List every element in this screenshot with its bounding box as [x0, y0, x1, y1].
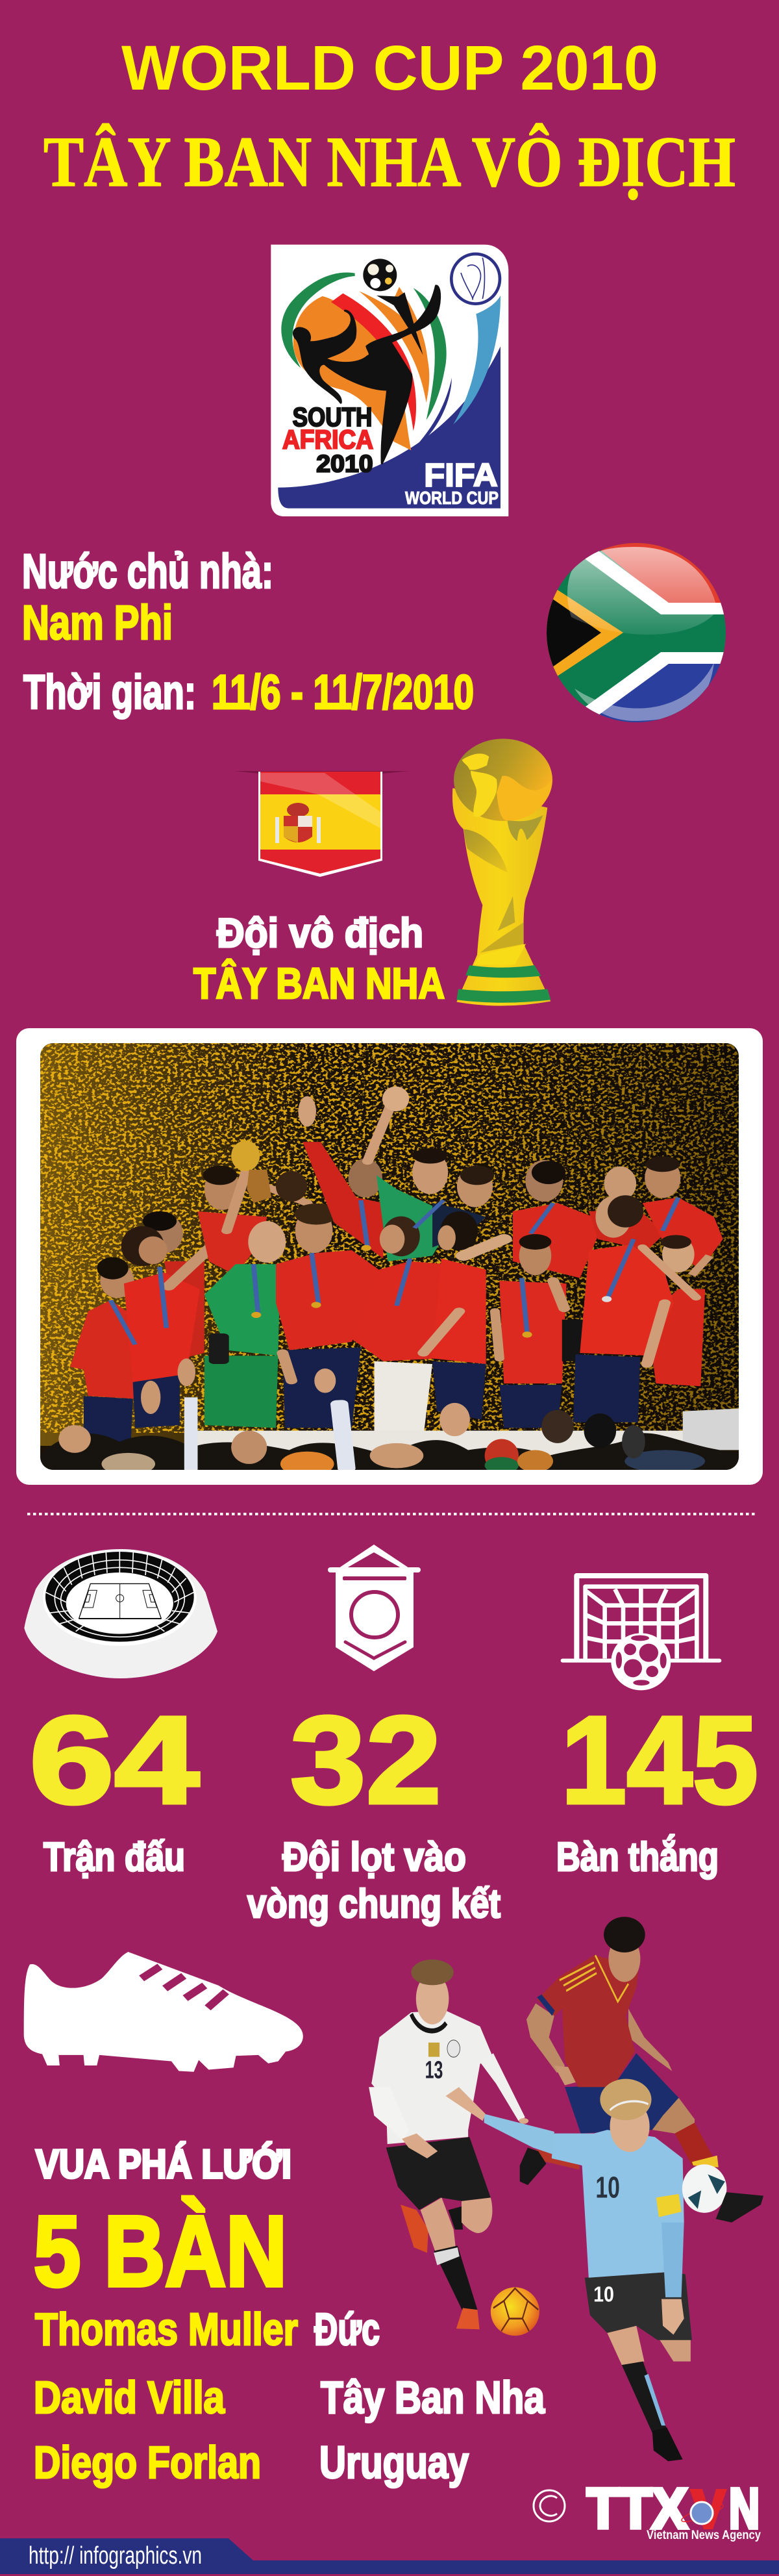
champion label: Đội vô địch — [217, 911, 423, 956]
player: Diego Forlan — [445, 2079, 692, 2461]
dates label: Thời gian: — [23, 665, 196, 719]
medals and ribbons — [110, 1198, 678, 1345]
stat label: teams line 2: vòng chung kết — [247, 1882, 501, 1926]
scorer: Thomas Muller: Thomas Muller — [35, 2304, 298, 2355]
divider — [27, 1513, 755, 1515]
footer URL: http:// infographics.vn — [29, 2542, 202, 2570]
icon: stadium — [24, 1549, 217, 1678]
stat: 145: 145 — [561, 1690, 758, 1830]
agency tagline: Vietnam News Agency — [647, 2529, 761, 2542]
icon: World Cup trophy — [452, 739, 552, 1006]
country: Spain: Tây Ban Nha — [321, 2372, 545, 2423]
icon: Spain flag pennant — [234, 771, 409, 877]
logo: TTXVN: TTX — [587, 2477, 687, 2540]
logo text South: SOUTH — [293, 402, 372, 432]
logo text 2010: 2010 — [316, 450, 373, 477]
small orange ball — [491, 2288, 539, 2336]
shirt number 10: 10 — [595, 2170, 620, 2204]
icon: South Africa flag sphere — [545, 539, 727, 727]
stat label: teams line 1: Đội lọt vào — [282, 1835, 466, 1880]
logo text World Cup: WORLD CUP — [405, 488, 499, 508]
copyright symbol — [534, 2490, 565, 2521]
title: World Cup 2010: WORLD CUP 2010 — [121, 32, 658, 103]
scorer: Diego Forlan: Diego Forlan — [34, 2437, 261, 2488]
logo text FIFA: FIFA — [424, 457, 498, 493]
dates value: 11/6 - 11/7/2010 — [212, 665, 474, 719]
icon: goal with ball — [563, 1576, 719, 1690]
stat label: goals: Bàn thắng — [556, 1835, 719, 1880]
top scorer heading: VUA PHÁ LƯỚI — [36, 2142, 291, 2187]
host country name: Nam Phi — [22, 596, 173, 650]
logo text Africa: AFRICA — [282, 425, 373, 455]
scorer: David Villa: David Villa — [34, 2372, 225, 2423]
player: Thomas Muller — [369, 1960, 528, 2329]
stat: 64: 64 — [29, 1690, 199, 1830]
players cut-out group — [369, 1917, 763, 2461]
country: Uruguay: Uruguay — [319, 2437, 469, 2488]
player: David Villa — [520, 1917, 719, 2185]
shorts number 10: 10 — [593, 2283, 614, 2306]
logo: TTXVN — [587, 2477, 761, 2542]
stat label: matches: Trận đấu — [43, 1835, 185, 1880]
icon: pennant — [328, 1545, 421, 1671]
country: Germany: Đức — [314, 2304, 380, 2355]
green keeper — [204, 1264, 280, 1356]
right boot — [716, 2192, 763, 2223]
shirt number 13: 13 — [425, 2056, 443, 2084]
footer band — [0, 2538, 779, 2574]
logo: South Africa 2010 FIFA World Cup — [271, 245, 508, 516]
host country label: Nước chủ nhà: — [22, 544, 273, 598]
bottom crowd — [197, 1430, 683, 1455]
panel: team celebration photo — [16, 1028, 763, 1485]
top scorer goals: 5 BÀN — [34, 2195, 287, 2307]
match ball — [682, 2164, 726, 2213]
far-left player — [70, 1300, 135, 1398]
logo: TTXVN: N — [729, 2477, 760, 2540]
stat: 32: 32 — [290, 1690, 441, 1830]
icon: football boot — [24, 1952, 303, 2072]
champion name: TÂY BAN NHA — [193, 959, 445, 1008]
